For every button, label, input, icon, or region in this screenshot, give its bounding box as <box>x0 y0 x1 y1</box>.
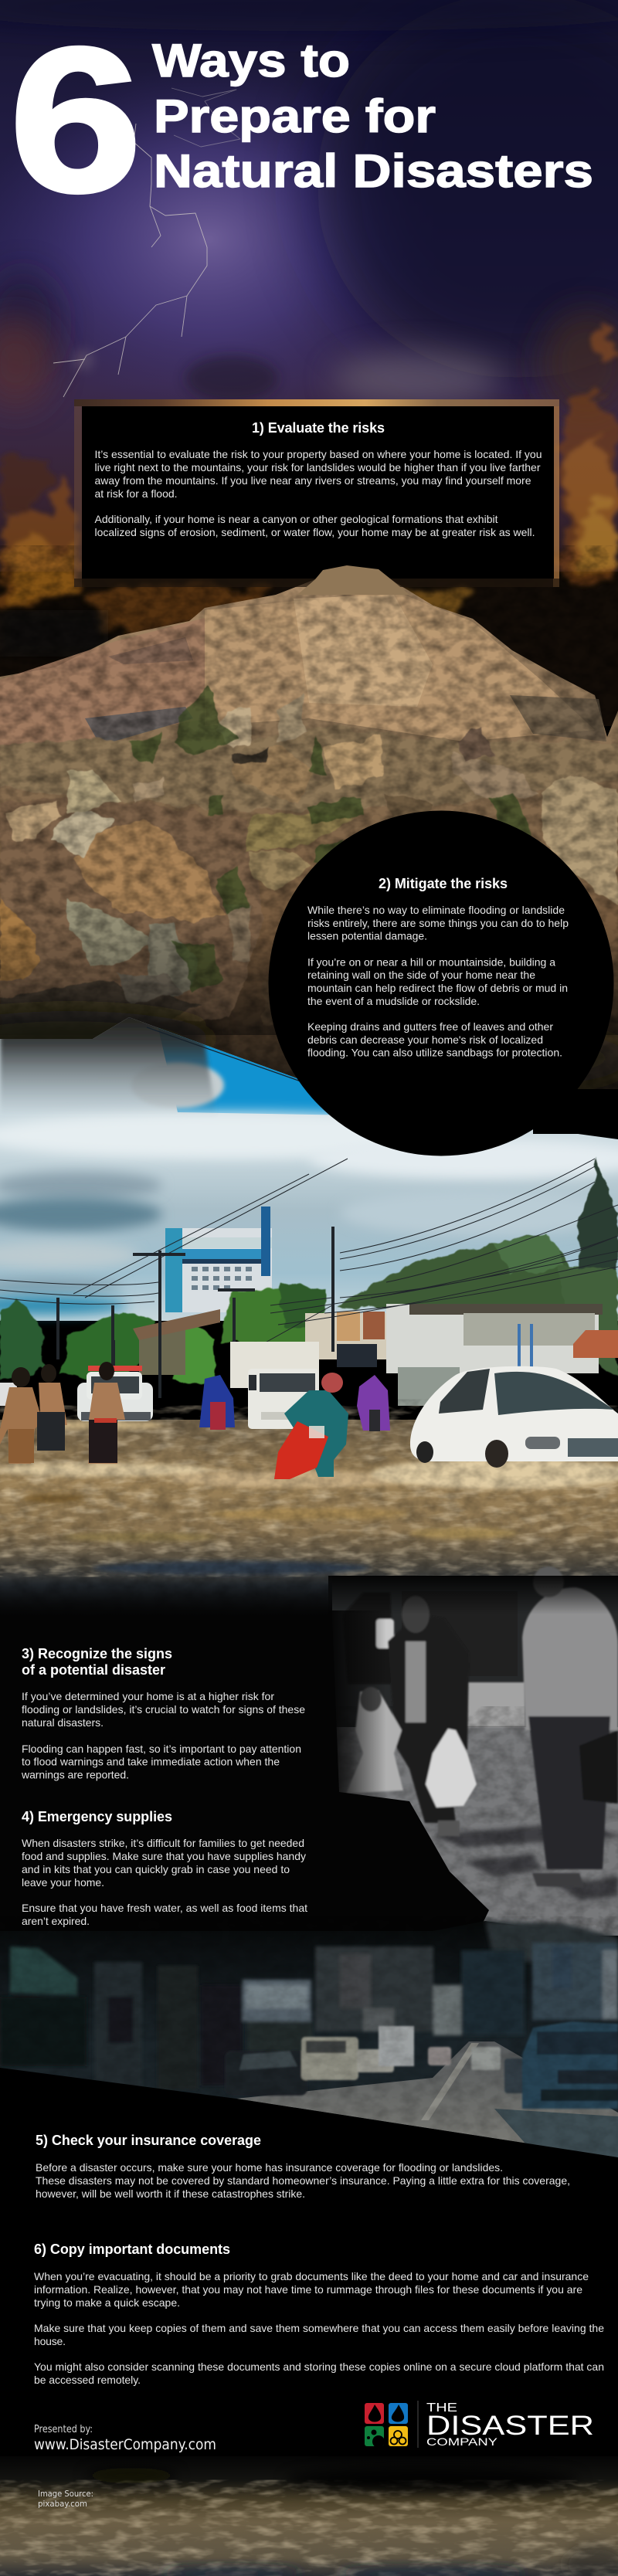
panel: dark rainy city street <box>0 1921 618 2163</box>
figures <box>343 1566 618 1888</box>
text block: 3) Recognize the signs: natural disasters. <box>22 1716 104 1729</box>
trees <box>0 1159 618 1383</box>
text block: 1) Evaluate the risks <box>94 420 542 538</box>
text block: 2) Mitigate the risks: lessen potential damage. <box>307 930 427 942</box>
text block: 6) Copy important documents: trying to make a quick escape. <box>34 2296 180 2309</box>
logo: The Disaster Company: COMPANY <box>426 2435 498 2448</box>
text block: 5) Check your insurance coverage: 5) Check your insurance coverage <box>36 2133 261 2148</box>
text block: 2) Mitigate the risks: 2) Mitigate the risks <box>379 876 508 891</box>
text block: 4) Emergency supplies: food and supplies. Make sure that you have supplies handy <box>22 1850 306 1862</box>
text block: 3) Recognize the signs: 3) Recognize the signs <box>22 1646 172 1661</box>
text block: 6) Copy important documents: house. <box>34 2335 66 2347</box>
people wading in flood <box>0 1362 125 1464</box>
text block: 2) Mitigate the risks: If you’re on or near a hill or mountainside, building a <box>307 956 555 969</box>
rock peak overlapping box <box>297 565 409 595</box>
panel: framed box with fire border <box>74 399 559 587</box>
text block: 2) Mitigate the risks: the event of a mudslide or rockslide. <box>307 995 480 1007</box>
text block: 1) Evaluate the risks: 1) Evaluate the risks <box>252 420 385 436</box>
text block: 3) Recognize the signs: warnings are reported. <box>21 1769 129 1781</box>
logo: The Disaster Company <box>365 2401 594 2448</box>
title <box>9 5 593 235</box>
cars <box>225 2021 618 2109</box>
text block: 4) Emergency supplies: aren’t expired. <box>22 1915 90 1927</box>
panel: flooded street photo <box>0 1004 618 1622</box>
text: image source: pixabay.com <box>38 2499 87 2509</box>
text block: 1) Evaluate the risks: live right next to the mountains, your risk for landslides would be higher than if you live farther <box>94 461 541 473</box>
text block: 2) Mitigate the risks: flooding. You can also utilize sandbags for protection. <box>307 1046 562 1058</box>
text block: 1) Evaluate the risks: localized signs of erosion, sediment, or water flow, your home may be at greater risk as well. <box>94 526 535 538</box>
icon: water <box>389 2403 408 2424</box>
text block: 2) Mitigate the risks: While there’s no way to eliminate flooding or landslide <box>307 904 565 916</box>
text block: 1) Evaluate the risks: away from the mountains. If you live near any rivers or streams, you may find yourself more <box>94 474 531 487</box>
flood water <box>0 1420 618 1622</box>
text block: 5) Check your insurance coverage <box>36 2133 570 2200</box>
text block: 3) Recognize the signs: Flooding can happen fast, so it’s important to pay attention <box>22 1743 301 1755</box>
text block: 3) Recognize the signs: flooding or landslides, it’s crucial to watch for signs of these <box>22 1703 305 1716</box>
riders on scooters <box>199 1373 390 1479</box>
text block: 6) Copy important documents: Make sure that you keep copies of them and save them somewhere that you can access them easily before leaving the <box>34 2322 604 2334</box>
text block: 6) Copy important documents: be accessed remotely. <box>34 2374 141 2386</box>
utility poles and wires <box>0 1159 618 1398</box>
text block: 4) Emergency supplies: Ensure that you have fresh water, as well as food items that <box>22 1902 307 1914</box>
vehicle: white police car <box>0 1366 153 1421</box>
boulders <box>0 695 618 1035</box>
text block: 1) Evaluate the risks: at risk for a flood. <box>94 487 178 500</box>
text block: 3) Recognize the signs: of a potential disaster <box>22 1662 165 1678</box>
shop buildings <box>133 1304 618 1406</box>
title: Prepare for <box>154 90 436 142</box>
text: image source: Image Source: <box>38 2489 93 2499</box>
text block: 3) Recognize the signs: to flood warnings and take immediate action when the <box>22 1755 280 1767</box>
title: Ways to <box>152 35 350 87</box>
icon: fire <box>365 2403 384 2424</box>
title: 6 <box>9 5 142 235</box>
panel: black circle <box>269 811 613 1156</box>
plants <box>127 687 535 990</box>
text block: 6) Copy important documents: 6) Copy important documents <box>34 2242 230 2257</box>
vehicle: white minitruck <box>230 1342 319 1429</box>
text block: 5) Check your insurance coverage: These disasters may not be covered by standard homeowner’s insurance. Paying a little extra for this coverage, <box>36 2174 570 2187</box>
text: presented by: www.DisasterCompany.com <box>34 2436 216 2453</box>
panel: black lower section <box>0 2068 618 2549</box>
text block: 2) Mitigate the risks: retaining wall on the side of your home near the <box>307 969 535 981</box>
blue sky and clouds <box>0 1012 618 1315</box>
background: wildfire flames <box>0 328 618 726</box>
text block: 2) Mitigate the risks: risks entirely, there are some things you can do to help <box>307 917 569 929</box>
text block: 6) Copy important documents <box>34 2242 604 2386</box>
text block: 5) Check your insurance coverage: however, will be well worth it if these catastrophes strike. <box>36 2187 305 2200</box>
icon: mold <box>365 2426 385 2448</box>
text: presented by: Presented by: <box>34 2424 93 2435</box>
text block: 5) Check your insurance coverage: Before a disaster occurs, make sure your home has insurance coverage for flooding or landslides. <box>36 2161 503 2174</box>
text block: 4) Emergency supplies: and in kits that you can quickly grab in case you need to <box>22 1863 290 1875</box>
text block: 1) Evaluate the risks: It’s essential to evaluate the risk to your property based on where your home is located. If you <box>94 448 542 460</box>
icon: biohazard <box>389 2426 408 2446</box>
text block: 3) Recognize the signs: If you’ve determined your home is at a higher risk for <box>22 1690 274 1702</box>
text block: 6) Copy important documents: information. Realize, however, that you may not have time to rummage through files for these documents if you are <box>34 2283 582 2296</box>
storefronts <box>0 1943 618 2089</box>
background: muddy flood water at bottom <box>0 2456 618 2576</box>
text block: 1) Evaluate the risks: Additionally, if your home is near a canyon or other geological formations that exhibit <box>94 513 498 525</box>
text block: 6) Copy important documents: You might also consider scanning these documents and storing these copies online on a secure cloud platform that can <box>34 2360 604 2373</box>
text block: 2) Mitigate the risks: mountain can help redirect the flow of debris or mud in <box>307 982 568 994</box>
photo: black-and-white street crowd <box>328 1566 618 1936</box>
text block: 3) Recognize the signs <box>21 1646 305 1781</box>
icon: lightning bolt <box>53 88 240 397</box>
text block: 2) Mitigate the risks: debris can decrease your home's risk of localized <box>307 1033 543 1046</box>
text: presented by <box>34 2424 216 2453</box>
text block: 4) Emergency supplies: When disasters strike, it’s difficult for families to get needed <box>22 1837 304 1849</box>
logo: The Disaster Company: THE <box>426 2401 457 2415</box>
panel: right black band behind circle <box>533 1089 618 1134</box>
background: stormy night sky <box>0 0 618 618</box>
text block: 4) Emergency supplies <box>22 1809 307 1927</box>
vehicle: white sedan <box>410 1366 618 1468</box>
text block: 2) Mitigate the risks <box>307 876 569 1058</box>
text block: 4) Emergency supplies: 4) Emergency supplies <box>22 1809 172 1824</box>
high-rise building <box>165 1207 272 1312</box>
panel: black text backdrop for sections 3 and 4 <box>0 1576 489 1946</box>
panel: rocky landslide hillside <box>0 565 618 1097</box>
text block: 6) Copy important documents: When you’re evacuating, it should be a priority to grab documents like the deed to your home and car and insurance <box>34 2270 589 2282</box>
text: image source <box>38 2489 93 2509</box>
text block: 4) Emergency supplies: leave your home. <box>22 1876 104 1889</box>
text block: 2) Mitigate the risks: Keeping drains and gutters free of leaves and other <box>307 1020 553 1033</box>
logo: The Disaster Company: DISASTER <box>426 2411 594 2441</box>
title: Natural Disasters <box>154 145 593 197</box>
